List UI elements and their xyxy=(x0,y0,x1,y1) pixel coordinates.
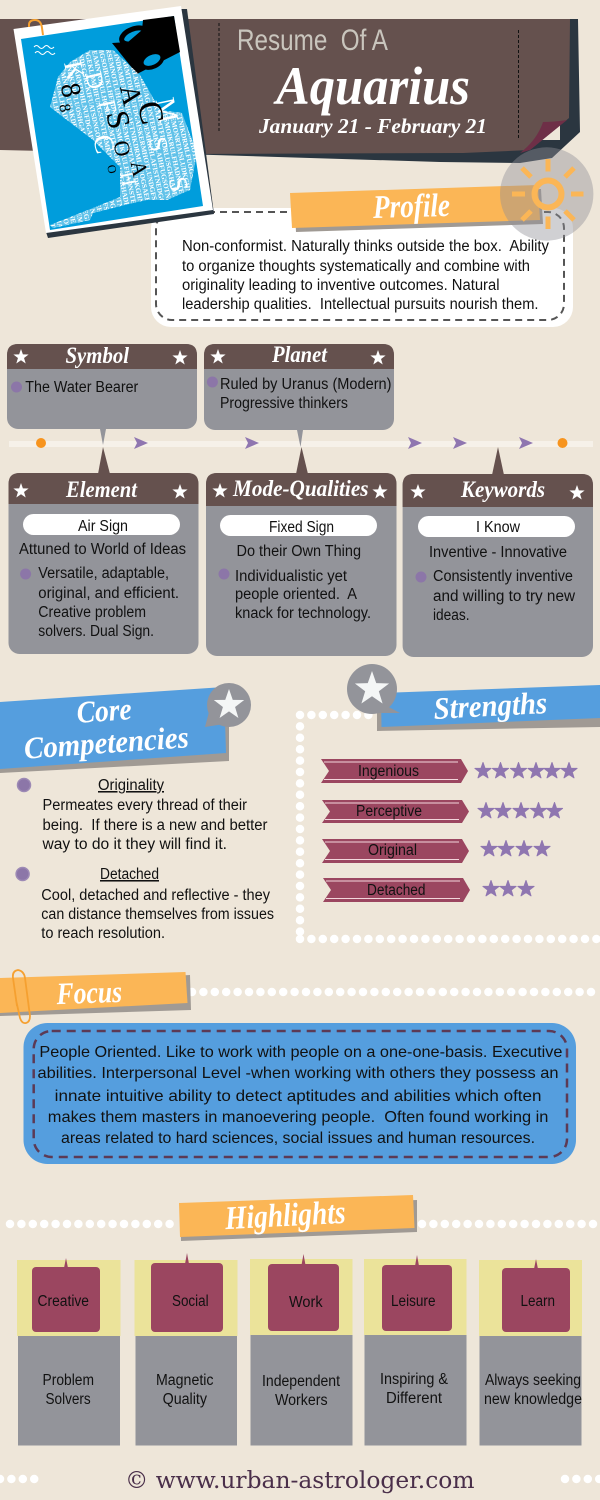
panel: element: Attuned to World of Ideas xyxy=(19,541,186,558)
dotted footer accents xyxy=(0,1475,600,1483)
letter cloud head: S xyxy=(143,134,174,154)
profile text xyxy=(182,238,549,313)
letter cloud head: S xyxy=(163,174,194,194)
dotted divider: highlights xyxy=(10,1220,600,1228)
letter cloud head: MOTHANDEGSRLKIFUATSDNGOEMRKHLAFISTNEDGOUKMRA xyxy=(71,26,124,241)
letter cloud head: ASTRNOGEKLDMHIFUAGSONTERMKDLAIHFUGSOTNERAKMD xyxy=(30,35,83,251)
rating: ingenious: Ingenious xyxy=(358,763,419,780)
icon: water jug xyxy=(112,16,180,74)
panel: focus: makes them masters in manoevering people. Often found working in xyxy=(48,1109,548,1126)
panel: mode-qualities: people oriented. A xyxy=(235,586,358,603)
letter cloud head: KDAFIGRSEMNOTLUHAKDFGSEMONRTAISLUDKGHNEAFTSO xyxy=(98,21,151,232)
profile text: to organize thoughts systematically and combine with xyxy=(182,258,530,275)
text block: core competencies list: being. If there is a new and better xyxy=(42,817,268,834)
letter cloud head: FUNGIDSEKARMTOHLNUFDGAISKERMHOTLUNDGFSIAEMKR xyxy=(16,38,69,251)
panel: focus: abilities. Interpersonal Level -when working with others they possess an xyxy=(38,1065,558,1082)
letter cloud head: O xyxy=(108,138,136,159)
highlight column: leisure: Inspiring & xyxy=(380,1371,449,1388)
letter cloud head: HOSEAGTINDKMRFLUOSHGAETNIKDRMLFUOGSAEHTINKDM xyxy=(105,19,158,233)
letter cloud head: ASTRNOGEKLDMHIFUAGSONTERMKDLAIHFUGSOTNERAKMD xyxy=(167,6,220,221)
panel: symbol: The Water Bearer xyxy=(25,379,138,396)
icon: star bubble xyxy=(347,664,400,714)
panel: element: Versatile, adaptable, xyxy=(38,565,169,582)
title text: Aquarius xyxy=(273,56,470,116)
letter cloud head: NDTEAMGSOIRUKLHFADNGTESMOIKRULFHADNSTEGIOKMR xyxy=(91,22,144,236)
letter cloud head: KDAFIGRSEMNOTLUHAKDFGSEMONRTAISLUDKGHNEAFTSO xyxy=(146,10,199,222)
panel: element xyxy=(8,447,198,654)
panel: element: Element xyxy=(65,477,138,502)
letter cloud head: C xyxy=(130,98,171,128)
header banner xyxy=(0,19,580,163)
panel: element: Air Sign xyxy=(78,518,128,535)
chart: strengths ratings xyxy=(321,759,577,902)
panel: focus: innate intuitive ability to detect aptitudes and abilities which often xyxy=(55,1088,541,1105)
letter cloud head: A xyxy=(113,82,148,109)
highlight column: work: Independent xyxy=(262,1373,341,1390)
text block: core competencies list xyxy=(16,777,274,942)
icon: paper clip xyxy=(13,970,30,1023)
highlight column: creative: Problem xyxy=(42,1372,94,1389)
heading: highlights: Highlights xyxy=(223,1195,346,1237)
panel: focus xyxy=(24,1023,576,1164)
panel: symbol: Symbol xyxy=(66,343,130,368)
profile text: originality leading to inventive outcomes. Natural xyxy=(182,277,500,294)
highlight column: creative: Solvers xyxy=(46,1391,91,1408)
panel: planet: Ruled by Uranus (Modern) xyxy=(220,376,392,393)
heading: highlights xyxy=(179,1195,417,1241)
letter cloud head: F xyxy=(93,97,121,116)
letter cloud head: C xyxy=(86,132,120,157)
letter cloud head: MOTHANDEGSRLKIFUATSDNGOEMRKHLAFISTNEDGOUKMRA xyxy=(119,16,172,231)
rating: perceptive xyxy=(322,800,563,823)
letter cloud head xyxy=(50,50,196,228)
rating: ingenious xyxy=(321,759,577,783)
panel: element: Creative problem xyxy=(38,604,146,621)
highlight column: work: Workers xyxy=(275,1392,328,1409)
letter cloud head: H xyxy=(116,169,140,188)
letter cloud head: GDIKSFEAMNTORULHGSDKAEMTFINORLUSGKHADEMNTFOR xyxy=(132,13,186,229)
rating: detached: Detached xyxy=(367,882,426,899)
panel: planet: Planet xyxy=(271,342,328,367)
heading: core competencies xyxy=(0,683,251,773)
panel: keywords xyxy=(403,447,593,657)
letter cloud head: ASTRNOGEKLDMHIFUAGSONTERMKDLAIHFUGSOTNERAKMD xyxy=(78,25,131,240)
heading: core competencies: Competencies xyxy=(23,719,190,766)
text block: core competencies list: Cool, detached and reflective - they xyxy=(41,887,270,904)
icon: sun xyxy=(500,147,593,241)
panel: keywords: Keywords xyxy=(460,477,545,502)
panel: keywords: I Know xyxy=(476,519,521,536)
panel: mode-qualities: Mode-Qualities xyxy=(232,476,369,501)
letter cloud head: K xyxy=(58,58,90,83)
rating: original: Original xyxy=(368,842,417,859)
panel: profile xyxy=(151,185,573,327)
letter cloud head: HOSEAGTINDKMRFLUOSHGAETNIKDRMLFUOGSAEHTINKDM xyxy=(153,9,206,223)
letter cloud head: NDTEAMGSOIRUKLHFADNGTESMOIKRULFHADNSTEGIOKMR xyxy=(43,32,96,246)
title text xyxy=(237,24,487,138)
profile text: Non-conformist. Naturally thinks outside the box. Ability xyxy=(182,238,549,255)
letter cloud head: GDIKSFEAMNTORULHGSDKAEMTFINORLUSGKHADEMNTFOR xyxy=(173,5,227,220)
highlight column: social xyxy=(134,1253,238,1446)
panel: keywords: Inventive - Innovative xyxy=(429,544,567,561)
letter cloud head: MOTHANDEGSRLKIFUATSDNGOEMRKHLAFISTNEDGOUKMRA xyxy=(180,3,233,218)
letter cloud head: MOTHANDEGSRLKIFUATSDNGOEMRKHLAFISTNEDGOUKMRA xyxy=(23,37,76,252)
highlight column: leisure: Different xyxy=(386,1390,443,1407)
heading: focus xyxy=(0,970,191,1023)
text block: core competencies list: can distance themselves from issues xyxy=(41,906,274,923)
panel: mode-qualities: Fixed Sign xyxy=(269,519,334,536)
text block: core competencies list: way to do it they will find it. xyxy=(41,836,227,853)
profile text: leadership qualities. Intellectual pursuits nourish them. xyxy=(182,296,538,313)
letter cloud head: NDTEAMGSOIRUKLHFADNGTESMOIKRULFHADNSTEGIOKMR xyxy=(139,12,192,225)
panel: keywords: and willing to try new xyxy=(433,588,576,605)
footer credit: © www.urban-astrologer.com xyxy=(125,1468,475,1494)
letter cloud head: HOSEAGTINDKMRFLUOSHGAETNIKDRMLFUOGSAEHTINKDM xyxy=(9,39,62,253)
title text: January 21 - February 21 xyxy=(258,114,487,138)
highlight column: social: Social xyxy=(172,1293,209,1310)
letter cloud head: GDIKSFEAMNTORULHGSDKAEMTFINORLUSGKHADEMNTFOR xyxy=(84,23,138,239)
panel: mode-qualities: Individualistic yet xyxy=(235,568,348,585)
panel: element: solvers. Dual Sign. xyxy=(38,623,154,640)
letter cloud head: FUNGIDSEKARMTOHLNUFDGAISKERMHOTLUNDGFSIAEMKR xyxy=(160,7,213,221)
icon: star bubble xyxy=(205,683,251,727)
panel: focus: People Oriented. Like to work with people on a one-one-basis. Executive xyxy=(39,1044,563,1061)
highlight column: learn: Always seeking xyxy=(485,1372,581,1389)
rating: detached xyxy=(323,878,534,902)
letter cloud head: 8 xyxy=(54,80,87,100)
highlight column: learn: Learn xyxy=(520,1293,555,1310)
panel: strengths frame xyxy=(300,715,600,940)
text block: core competencies list: Permeates every thread of their xyxy=(42,797,247,814)
title text: Resume Of A xyxy=(237,24,388,57)
highlight column: work: Work xyxy=(289,1294,323,1311)
letter cloud head: 8 xyxy=(55,102,74,114)
panel: focus: areas related to hard sciences, social issues and human resources. xyxy=(61,1130,535,1147)
panel: mode-qualities: knack for technology. xyxy=(235,605,371,622)
panel: element: original, and efficient. xyxy=(38,585,179,602)
rating: original xyxy=(322,839,550,863)
panel: keywords: ideas. xyxy=(433,607,470,624)
heading: focus: Focus xyxy=(55,974,123,1011)
highlight column: leisure: Leisure xyxy=(391,1293,436,1310)
letter cloud head: HOSEAGTINDKMRFLUOSHGAETNIKDRMLFUOGSAEHTINKDM xyxy=(57,29,110,243)
icon: aquarius waves xyxy=(34,46,55,54)
heading: core competencies: Core xyxy=(75,691,133,730)
profile heading ribbon: Profile xyxy=(372,188,450,226)
letter cloud head: FUNGIDSEKARMTOHLNUFDGAISKERMHOTLUNDGFSIAEMKR xyxy=(64,28,117,241)
letter cloud head: KDAFIGRSEMNOTLUHAKDFGSEMONRTAISLUDKGHNEAFTSO xyxy=(187,2,240,213)
highlight column: social: Quality xyxy=(163,1391,207,1408)
panel: symbol xyxy=(7,343,197,445)
highlight column: social: Magnetic xyxy=(156,1372,214,1389)
profile heading ribbon xyxy=(290,185,543,232)
letter cloud head: A xyxy=(125,158,153,179)
highlight column: creative: Creative xyxy=(38,1293,89,1310)
text block: core competencies list: Originality xyxy=(98,777,164,794)
panel: keywords: Consistently inventive xyxy=(433,568,573,585)
highlight column: learn xyxy=(479,1259,582,1446)
highlight column: learn: new knowledge xyxy=(484,1391,582,1408)
letter cloud head: FUNGIDSEKARMTOHLNUFDGAISKERMHOTLUNDGFSIAEMKR xyxy=(112,18,165,231)
highlight column: leisure xyxy=(364,1255,466,1446)
panel: planet xyxy=(204,342,394,447)
letter cloud head: M xyxy=(149,95,184,126)
letter cloud head: D xyxy=(79,69,108,92)
timeline xyxy=(9,437,593,449)
icon: paper clip on poster xyxy=(29,20,43,35)
panel: mode-qualities xyxy=(206,447,396,656)
text block: core competencies list: to reach resolution. xyxy=(41,925,165,942)
text block: core competencies list: Detached xyxy=(100,866,159,883)
letter cloud head: GDIKSFEAMNTORULHGSDKAEMTFINORLUSGKHADEMNTFOR xyxy=(36,34,90,249)
letter cloud head: ASTRNOGEKLDMHIFUAGSONTERMKDLAIHFUGSOTNERAKMD xyxy=(125,15,179,230)
panel: planet: Progressive thinkers xyxy=(220,395,348,412)
letter cloud head: S xyxy=(99,107,138,132)
highlight column: creative xyxy=(17,1258,120,1446)
poster: Aquarius artwork xyxy=(14,6,214,238)
rating: perceptive: Perceptive xyxy=(356,803,422,820)
dotted divider: focus xyxy=(192,988,600,996)
panel: mode-qualities: Do their Own Thing xyxy=(236,543,361,560)
highlight column: work xyxy=(250,1254,352,1446)
letter cloud head: O xyxy=(104,163,120,175)
heading: strengths xyxy=(347,664,600,731)
letter cloud head: KDAFIGRSEMNOTLUHAKDFGSEMONRTAISLUDKGHNEAFTSO xyxy=(50,31,103,243)
heading: strengths: Strengths xyxy=(433,685,548,726)
